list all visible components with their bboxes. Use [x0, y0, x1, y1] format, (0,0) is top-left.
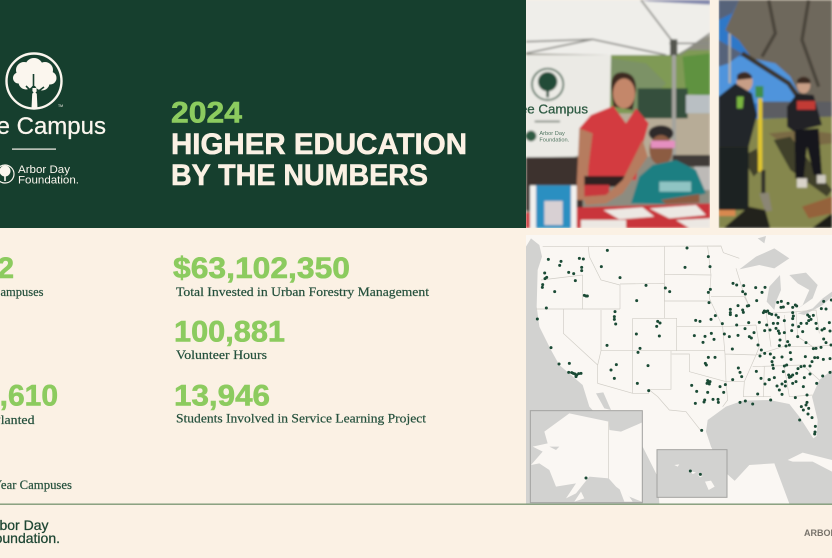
stat label: Students Involved in Service Learning Project — [176, 412, 427, 426]
map: Tree Campus locations — [526, 235, 832, 504]
title line 2: BY THE NUMBERS — [171, 159, 428, 192]
title line 1: HIGHER EDUCATION — [171, 128, 467, 161]
grass — [719, 117, 832, 228]
inset: Alaska — [530, 411, 642, 503]
icon: tree in circle: TM — [58, 104, 63, 108]
student 2 — [797, 77, 810, 93]
stat label: Total Invested in Urban Forestry Management — [176, 285, 430, 299]
Pacific ocean — [526, 238, 659, 504]
stat: trees planted — [0, 380, 58, 427]
shadows and dirt — [724, 207, 770, 228]
inset: Hawaii — [657, 450, 727, 497]
stat: volunteer hours — [174, 316, 285, 362]
Arbor Day Foundation logo: Foundation. — [18, 174, 79, 186]
title year: 2024 — [171, 96, 243, 130]
stat: total invested — [173, 252, 430, 299]
stat: campuses — [0, 252, 44, 299]
Arbor Day Foundation logo — [0, 164, 79, 186]
tent canopy — [526, 0, 710, 55]
banner — [526, 55, 611, 157]
stat number: ,610 — [0, 380, 58, 412]
footer logo: Arbor Day Foundation — [0, 517, 60, 546]
woman with red shirt — [611, 72, 636, 110]
stat number: 100,881 — [174, 316, 285, 348]
banner text: Arbor Day — [539, 131, 565, 137]
student 1 — [737, 72, 753, 92]
QR code sign — [530, 185, 577, 228]
logo divider — [12, 148, 56, 150]
parking lot and cars — [760, 102, 832, 118]
Cuba — [788, 453, 832, 472]
Yucatan and Mexico — [734, 464, 773, 485]
title — [171, 96, 467, 192]
stat number: $63,102,350 — [173, 252, 350, 285]
vehicles — [638, 88, 688, 118]
yellow shovel — [758, 98, 762, 172]
campus location dots — [537, 248, 831, 478]
header panel — [0, 0, 526, 228]
icon: tree in circle — [6, 54, 63, 108]
logo: Tree Campus — [0, 54, 106, 186]
red table — [526, 203, 710, 228]
banner text: Tree Campus — [508, 101, 588, 116]
Gulf of Mexico and Atlantic — [706, 370, 832, 504]
bare tree — [724, 0, 832, 104]
Baja California — [584, 387, 601, 410]
pavement — [609, 113, 710, 157]
banner text: Foundation. — [539, 137, 570, 143]
sky and trees — [609, 50, 710, 117]
photo: volunteers at Tree Campus table — [508, 0, 710, 228]
Arbor Day Foundation logo: Arbor Day — [18, 164, 71, 176]
footer divider line — [0, 504, 832, 505]
Great Lakes — [739, 248, 832, 315]
stat: students involved — [174, 380, 427, 426]
seated person — [649, 125, 673, 141]
state borders — [536, 246, 832, 432]
photo: students planting a tree — [719, 0, 832, 228]
stat label: Volunteer Hours — [176, 348, 267, 362]
stat number: 13,946 — [174, 380, 270, 412]
banner text — [526, 104, 588, 142]
Puget sound detail — [758, 236, 766, 243]
brick wall — [526, 157, 583, 211]
